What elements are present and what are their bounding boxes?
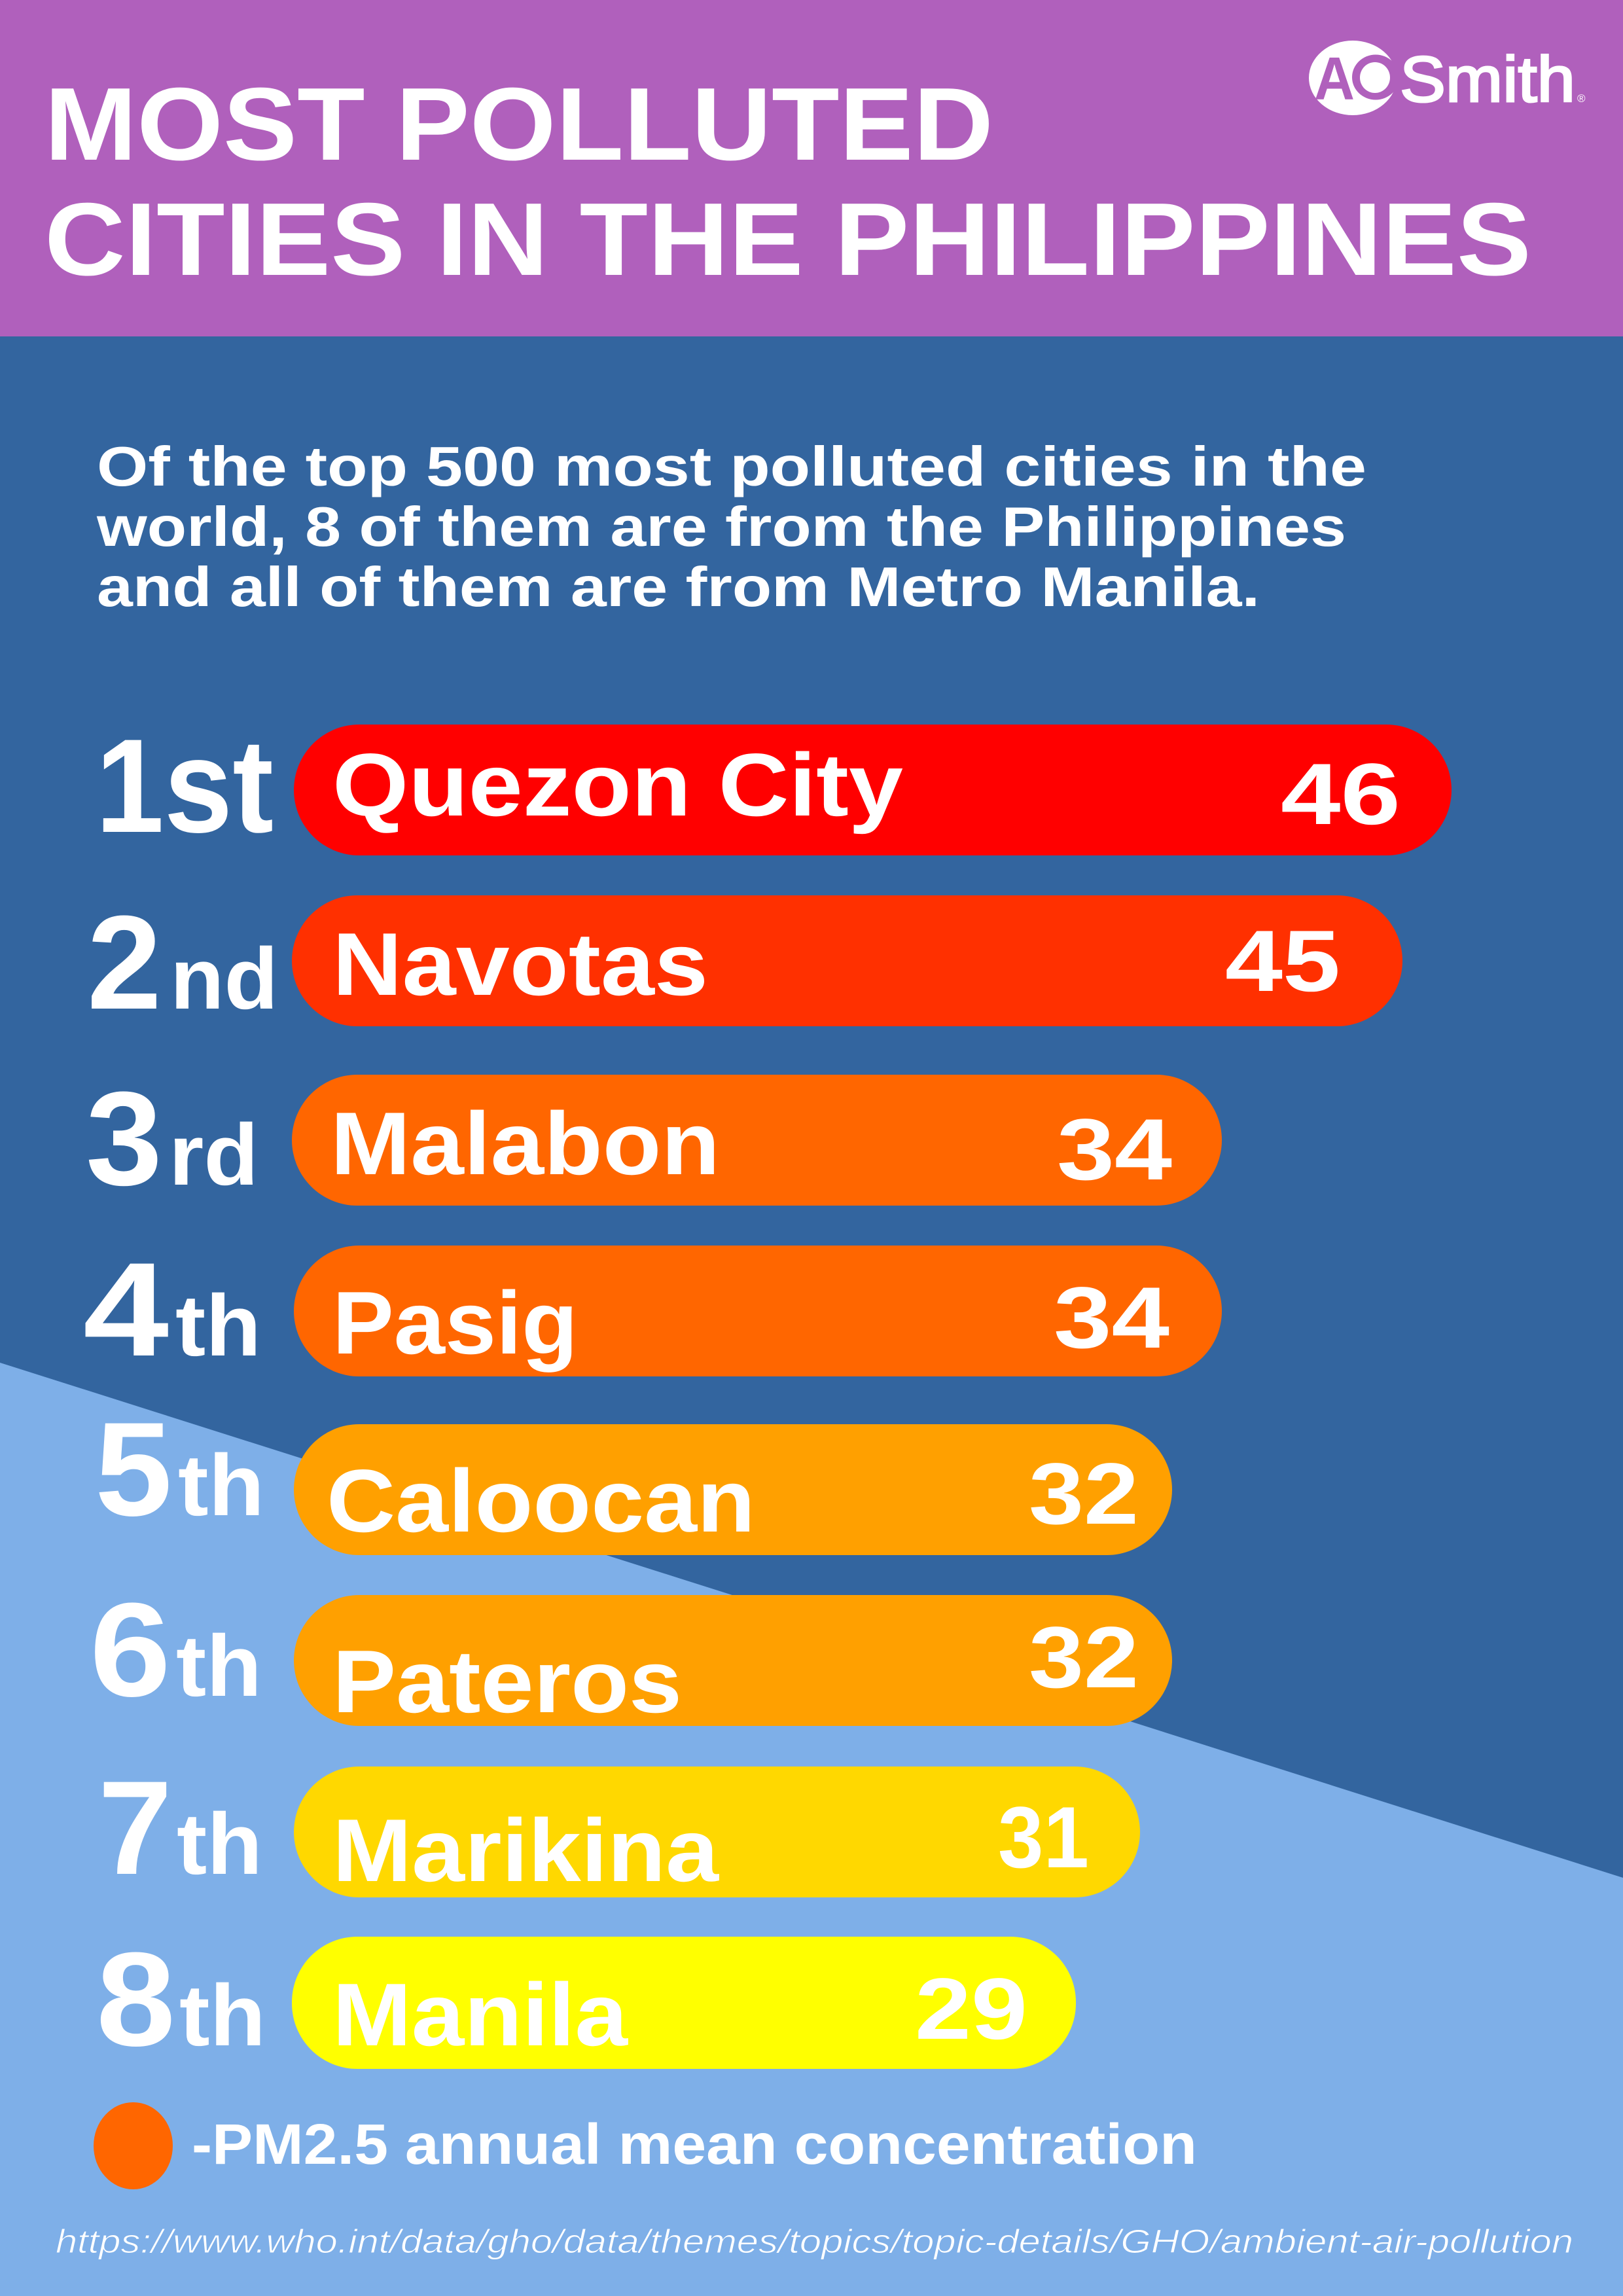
rank: 4th: 4 (83, 1235, 169, 1384)
value: 32: 32 (1029, 1609, 1139, 1706)
rank: 3rd (86, 1064, 259, 1213)
rank: 6th: 6 (90, 1575, 171, 1725)
bar: Navotas (292, 895, 1402, 1026)
source URL: https://www.who.int/data/gho/data/themes/topics/topic-details/GHO/ambient-air-pollution (56, 2223, 1573, 2260)
title: MOST POLLUTED (45, 67, 993, 182)
intro text: Of the top 500 most polluted cities in the (97, 436, 1366, 498)
rank: 5th: th (178, 1437, 264, 1534)
background: light blue diagonal panel (0, 1363, 1623, 2296)
ranking: row 7 Marikina (98, 1753, 1140, 1903)
bar: Malabon (292, 1075, 1222, 1206)
value: 34: 34 (1054, 1270, 1169, 1367)
rank: 2nd (87, 888, 278, 1037)
value: 32: 32 (1029, 1446, 1139, 1543)
city name: Pateros: Pateros (332, 1632, 682, 1731)
bar: Manila (292, 1937, 1076, 2069)
rank: 7th: 7 (98, 1753, 172, 1903)
rank: 3rd: 3 (86, 1064, 162, 1213)
value: 29: 29 (915, 1961, 1027, 2058)
rank: 7th: th (177, 1796, 262, 1893)
rank: 6th (90, 1575, 262, 1725)
legend label: -PM2.5 annual mean concentration (192, 2113, 1197, 2176)
intro text (96, 436, 1366, 619)
icon: legend colour dot (94, 2102, 173, 2189)
rank: 8th: 8 (96, 1925, 175, 2074)
value: 45: 45 (1225, 913, 1340, 1010)
ranking: row 1 Quezon City (96, 711, 1452, 861)
header band (0, 0, 1623, 336)
ranking: row 3 Malabon (86, 1064, 1222, 1213)
city name: Navotas: Navotas (332, 914, 708, 1014)
rank: 8th: th (179, 1967, 266, 2064)
logo: A.O. Smith: Smith (1400, 43, 1575, 115)
value: 46: 46 (1281, 746, 1400, 843)
logo: A.O. Smith: A (1314, 45, 1355, 113)
ranking: row 8 Manila (96, 1925, 1076, 2074)
city name: Pasig: Pasig (332, 1273, 578, 1372)
bar: Marikina (294, 1767, 1140, 1897)
bar: Pasig (294, 1246, 1222, 1376)
rank: 2nd: nd (170, 931, 278, 1028)
logo: A.O. Smith: ® (1577, 92, 1586, 105)
legend (94, 2102, 1197, 2189)
city name: Malabon: Malabon (330, 1094, 720, 1193)
intro text: and all of them are from Metro Manila. (97, 556, 1260, 619)
logo: A.O. Smith (1309, 41, 1586, 115)
bar: Quezon City (294, 725, 1452, 855)
rank: 3rd: rd (169, 1107, 259, 1204)
ranking: row 2 Navotas (87, 888, 1402, 1037)
title: CITIES IN THE PHILIPPINES (45, 182, 1531, 297)
rank: 5th: 5 (95, 1395, 172, 1544)
ranking: row 4 Pasig (83, 1235, 1222, 1384)
rank: 2nd: 2 (87, 888, 162, 1037)
value: 34: 34 (1057, 1102, 1172, 1198)
city name: Quezon City: Quezon City (332, 735, 903, 834)
bar: Caloocan (294, 1424, 1172, 1555)
rank: 4th (83, 1235, 261, 1384)
rank: 8th (96, 1925, 266, 2074)
title (45, 67, 1531, 297)
value: 31: 31 (998, 1789, 1089, 1886)
rank: 7th (98, 1753, 262, 1903)
bar: Pateros (294, 1595, 1172, 1726)
rank: 6th: th (176, 1618, 262, 1715)
city name: Manila: Manila (332, 1965, 628, 2064)
rank: 5th (95, 1395, 264, 1544)
city name: Caloocan: Caloocan (327, 1451, 755, 1551)
ranking: row 6 Pateros (90, 1575, 1172, 1731)
city name: Marikina: Marikina (332, 1801, 719, 1900)
rank: 4th: th (175, 1278, 261, 1374)
rank: 1st: 1st (96, 711, 274, 861)
intro text: world, 8 of them are from the Philippines (96, 496, 1346, 558)
ranking: row 5 Caloocan (95, 1395, 1172, 1555)
